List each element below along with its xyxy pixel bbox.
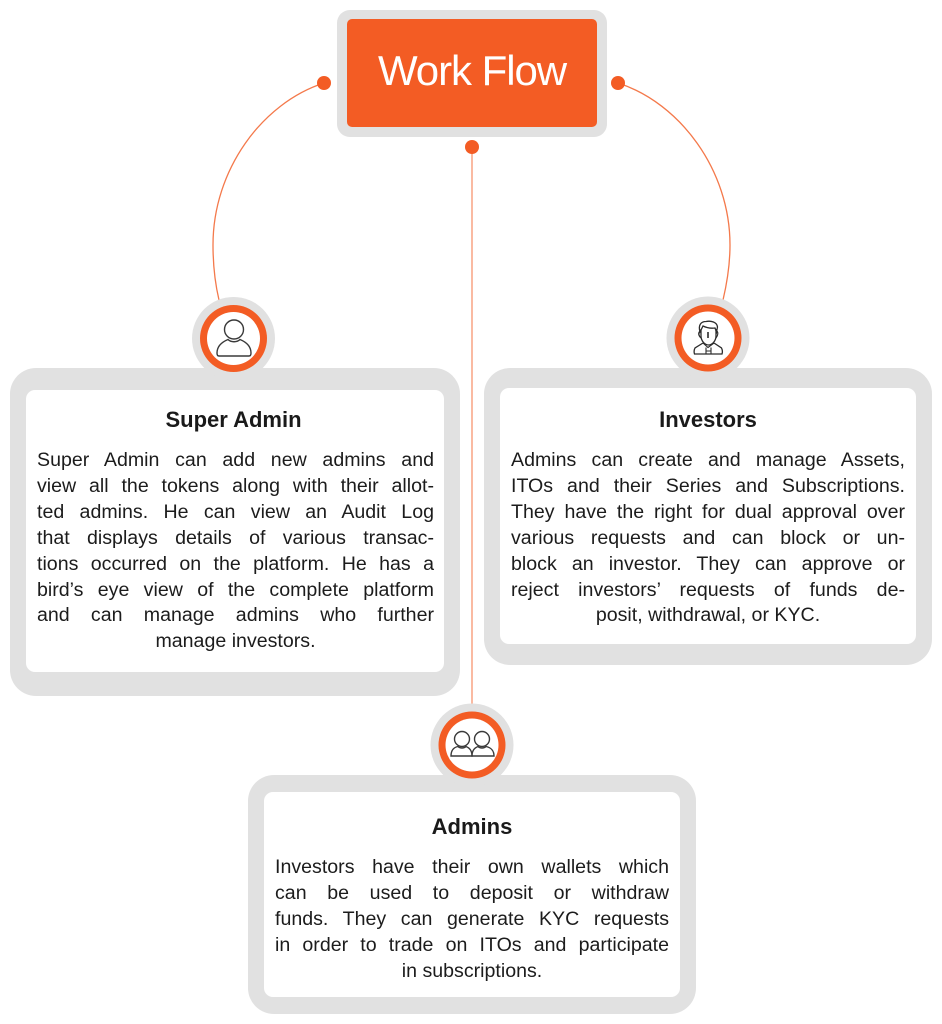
- title box: [337, 10, 607, 137]
- text: admins description: [275, 856, 669, 982]
- text: admins description: in subscriptions.: [402, 960, 542, 982]
- panel body: super admin: [26, 390, 444, 672]
- panel: super admin: [10, 368, 460, 696]
- text: super admin description: ted admins. He can view an Audit Log: [37, 501, 434, 523]
- title: Work Flow: [378, 47, 566, 94]
- panel body: admins: [264, 792, 680, 997]
- text: super admin description: bird’s eye view of the complete platform: [37, 579, 434, 601]
- panel: admins: [248, 775, 696, 1014]
- text: investors description: ITOs and their Series and Subscriptions.: [511, 475, 905, 497]
- text: super admin description: [37, 449, 434, 652]
- text: super admin description: Super Admin can add new admins and: [37, 449, 434, 471]
- text: investors description: various requests and can block or un-: [511, 527, 905, 549]
- text: admins description: in order to trade on ITOs and participate: [275, 934, 669, 956]
- text: investors description: [511, 449, 905, 626]
- text: super admin description: and can manage admins who further: [37, 604, 434, 626]
- heading: investors: Investors: [659, 407, 757, 432]
- title: [347, 19, 597, 127]
- text: super admin description: that displays details of various transac-: [37, 527, 434, 549]
- heading: admins: Admins: [432, 814, 512, 839]
- text: super admin description: manage investors.: [155, 630, 316, 652]
- text: admins description: Investors have their own wallets which: [275, 856, 669, 878]
- text: admins description: funds. They can generate KYC requests: [275, 908, 669, 930]
- text: super admin description: tions occurred on the platform. He has a: [37, 553, 434, 575]
- panel body: investors: [500, 388, 916, 644]
- text: super admin description: view all the tokens along with their allot-: [37, 475, 434, 497]
- text: investors description: They have the right for dual approval over: [511, 501, 905, 523]
- heading: super admin: Super Admin: [165, 407, 302, 432]
- text: admins description: can be used to deposit or withdraw: [275, 882, 669, 904]
- text: investors description: block an investor. They can approve or: [511, 553, 905, 575]
- panel: investors: [484, 368, 932, 665]
- text: investors description: posit, withdrawal, or KYC.: [596, 604, 820, 626]
- text: investors description: reject investors’ requests of funds de-: [511, 579, 905, 601]
- text: investors description: Admins can create and manage Assets,: [511, 449, 905, 471]
